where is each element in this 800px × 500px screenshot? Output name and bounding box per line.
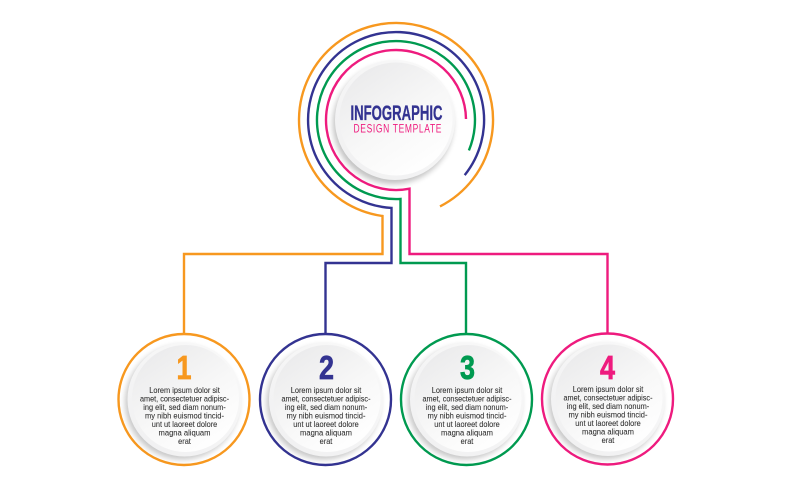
body text: erat [320, 437, 333, 446]
body text [140, 386, 229, 446]
step 4 panel [542, 334, 673, 464]
body text: magna aliquam [582, 428, 634, 436]
body text: ing elit, sed diam nonum- [567, 402, 650, 411]
body text: ing elit, sed diam nonum- [143, 403, 226, 412]
body text: ing elit, sed diam nonum- [426, 403, 509, 412]
number 2: 2 [319, 349, 334, 386]
subtitle: DESIGN TEMPLATE: DESIGN TEMPLATE [354, 123, 442, 136]
body text [422, 386, 512, 446]
body text: Lorem ipsum dolor sit [573, 385, 644, 394]
body text: my nibh euismod tincid- [428, 412, 507, 420]
body text: ing elit, sed diam nonum- [285, 403, 368, 412]
body text: magna aliquam [158, 429, 210, 438]
step 2 panel [260, 334, 391, 465]
body text [564, 385, 653, 445]
body text: Lorem ipsum dolor sit [291, 386, 362, 395]
body text: amet, consectetuer adipisc- [422, 394, 512, 404]
body text: amet, consectetuer adipisc- [282, 394, 371, 404]
body text: my nibh euismod tincid- [145, 412, 224, 421]
body text: amet, consectetuer adipisc- [564, 394, 653, 402]
body text: erat [461, 437, 474, 446]
body text: unt ut laoreet dolore [152, 420, 217, 429]
body text: amet, consectetuer adipisc- [140, 395, 229, 404]
title: INFOGRAPHIC: INFOGRAPHIC [350, 102, 442, 125]
step 1 panel [118, 334, 250, 465]
number 4: 4 [600, 349, 616, 386]
body text [282, 386, 371, 446]
body text: my nibh euismod tincid- [286, 412, 366, 420]
connector: blue ring and line to step 2 [308, 32, 484, 333]
number 3: 3 [460, 349, 475, 386]
body text: magna aliquam [441, 428, 493, 438]
step 3 panel [401, 334, 532, 465]
body text: erat [178, 437, 192, 446]
body text: Lorem ipsum dolor sit [149, 386, 221, 395]
body text: unt ut laoreet dolore [575, 419, 641, 428]
connector: pink ring and line to step 4 [326, 50, 608, 333]
body text: my nibh euismod tincid- [568, 410, 648, 420]
number 1: 1 [176, 349, 192, 386]
body text: unt ut laoreet dolore [293, 420, 359, 429]
connector: orange ring and line to step 1 [184, 23, 493, 333]
body text: magna aliquam [300, 428, 352, 438]
body text: unt ut laoreet dolore [434, 420, 500, 429]
central title disc [333, 60, 455, 184]
body text: erat [602, 436, 615, 445]
connector: green ring and line to step 3 [317, 41, 475, 333]
body text: Lorem ipsum dolor sit [432, 386, 503, 395]
